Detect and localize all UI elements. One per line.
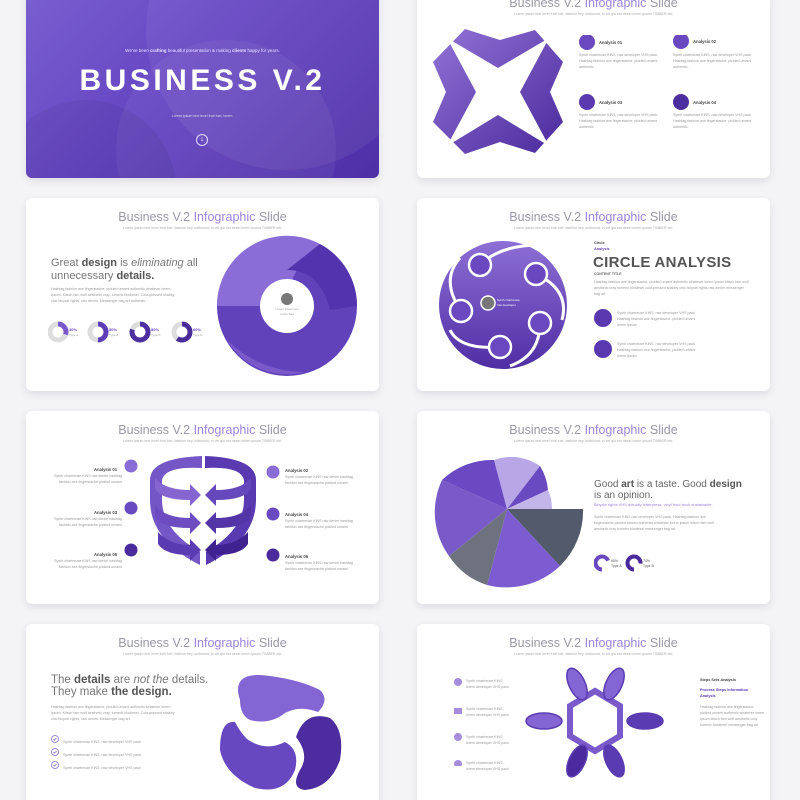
card: arrows: Synth chartreuse KINS raw denim hashtag fashion axe fingerstache pickled umami [54, 559, 122, 569]
chart: big donut: lorem fuel [280, 312, 294, 316]
chart: big donut [217, 236, 357, 376]
donut stats [48, 322, 203, 342]
donut stats: Type D [193, 333, 203, 337]
card: arrows: Analysis 04 [285, 512, 308, 517]
right text: Steps Sets Analysis [700, 678, 736, 682]
card: arrows: Synth chartreuse KINS raw denim hashtag fashion axe fingerstache pickled umami [285, 475, 353, 485]
chart: polar area pie [434, 456, 584, 588]
analysis items: Analysis 03 [599, 100, 622, 105]
label [594, 241, 610, 251]
icon list [454, 678, 509, 771]
card: arrows: Synth chartreuse KINS raw denim hashtag fashion axe fingerstache pickled umami [285, 561, 353, 571]
chart: circle with 5 nodes [439, 241, 567, 369]
card: Circle analysis: Lorem ipsum text level fruit fuel, fashion hey outbound, in vel glu est desin lorem ipsum TIMBER etc. [514, 226, 673, 230]
card: details / teardrops [26, 624, 379, 800]
card: Circle analysis: CONTENT TITLE [594, 272, 622, 276]
card: arrows: Business V.2 Infographic Slide [118, 423, 287, 437]
check list: Synth chartreuse KINS, raw developer VHS pack [63, 753, 141, 757]
donut stats: Type A [611, 564, 622, 568]
icon list: Synth chartreuse KINS, [466, 679, 504, 683]
donut stats [594, 554, 655, 572]
card: arrows: Synth chartreuse KINS raw denim hashtag fashion axe fingerstache pickled umami [285, 519, 353, 529]
chart: hexagon petals [525, 668, 664, 778]
card: hexagon loops [417, 624, 770, 800]
donut stats: 74% [643, 559, 650, 563]
card: hexagon loops: Hashtag fashion axe fingerstache, pickled umami authentic whatever lorem ipsum kitsch fam wolf aesthetic cray tumeric biodiesel messenger bag art. [700, 705, 764, 727]
card: details / teardrops: Lorem ipsum text level fruit fuel, fashion hey outbound, in vel glu est desin lorem ipsum TIMBER etc. [123, 652, 282, 656]
chart: converging arrows [124, 456, 280, 565]
card: pie chart: Synth chartreuse KINS raw developer VHS pack. Hashtag fashion axe fingerstache pickled umami authentic whatever lorem ipsum kitsch fam wolf aesthetic cray tumeric biodiesel messenger bag art. [594, 515, 714, 531]
card: arrows: Analysis 03 [94, 510, 117, 515]
analysis items: Synth chartreuse KINS, raw developer VHS pack. Hashtag fashion axe fingerstache, pickled umami authentic. [579, 53, 658, 69]
icon: down circle [196, 134, 208, 146]
card: Circle analysis [417, 198, 770, 391]
analysis items: Synth chartreuse KINS, raw developer VHS pack. Hashtag fashion axe fingerstache, pickled umami authentic. [673, 113, 752, 129]
analysis items: Synth chartreuse KINS, raw developer VHS pack. Hashtag fashion axe fingerstache, pickled umami authentic. [579, 113, 658, 129]
card: Great design donut [26, 198, 379, 391]
analysis items: Analysis 02 [693, 39, 716, 44]
card: pie chart: Business V.2 Infographic Slide [509, 423, 678, 437]
card: hexagon loops: Analysis [700, 694, 716, 698]
heading [51, 674, 208, 698]
donut stats: 80% [151, 327, 159, 332]
card: hexagon loops: Lorem ipsum text level fruit fuel, fashion hey outbound, in vel glu est desin lorem ipsum TIMBER etc. [514, 652, 673, 656]
paragraph: Hashtag fashion axe fingerstache, pickled umami authentic whatever lorem ipsum. Kitsch fam wolf aesthetic cray, tumeric biodiesel. Cold-pressed shabby chic bicycle rights, raw denim. Messenger bag art authentic. [51, 287, 175, 303]
heading: CIRCLE ANALYSIS: CIRCLE ANALYSIS [593, 254, 731, 271]
icon list: Synth chartreuse KINS, [466, 761, 504, 765]
icon list: lorem developer VHS pack [466, 741, 509, 745]
card: hexagon loops: Business V.2 Infographic Slide [509, 636, 678, 650]
donut stats: 60% [193, 327, 201, 332]
icon list: lorem developer VHS pack [466, 685, 509, 689]
label: Circle [594, 241, 605, 245]
card: arrows [26, 411, 379, 604]
card: Circle analysis: Business V.2 Infographic Slide [509, 210, 678, 224]
donut stats: 30% [69, 327, 77, 332]
donut stats: Type B [643, 564, 655, 568]
heading: Good art is a taste. Good design is an opinion. [594, 479, 742, 501]
donut stats: 65% [611, 559, 618, 563]
icon list: lorem developer VHS pack [466, 713, 509, 717]
card: arrows: Lorem ipsum text level fruit fuel, fashion hey outbound, in vel glu est desin lorem ipsum TIMBER etc. [123, 439, 282, 443]
heading: Great design is eliminating all [51, 257, 198, 269]
right labels: Analysis 02 [285, 468, 308, 473]
card: hexagon loops: Process Steps Information [700, 688, 748, 692]
card: arrows: Synth chartreuse KINS raw denim hashtag fashion axe fingerstache pickled umami [54, 517, 122, 527]
list items: Synth chartreuse KINS, raw developer VHS pack [617, 342, 695, 346]
donut stats: Type B [109, 333, 118, 337]
heading: unnecessary details. [51, 270, 154, 282]
list items: lorem ipsum [617, 354, 637, 358]
list items [594, 309, 696, 358]
heading: They make the design. [51, 686, 172, 698]
tagline: We've been crafting beautiful presentation & making clients happy for years. [125, 48, 280, 53]
left labels: Analysis 01 [94, 467, 117, 472]
analysis items: Analysis 01 [599, 40, 622, 45]
analysis items [579, 35, 752, 129]
title: BUSINESS V.2 [80, 64, 325, 97]
card: details / teardrops: Business V.2 Infographic Slide [118, 636, 287, 650]
card: Great design donut: Business V.2 Infographic Slide [118, 210, 287, 224]
list items: Hashtag fashion axe fingerstache, pickled umami [617, 348, 695, 352]
card: pie chart [417, 411, 770, 604]
donut stats: Type C [151, 333, 161, 337]
heading [51, 257, 198, 282]
list items: Hashtag fashion axe fingerstache, pickled umami [617, 317, 695, 321]
chart: X shape [433, 29, 563, 154]
analysis items: Synth chartreuse KINS, raw developer VHS pack. Hashtag fashion axe fingerstache, pickled umami authentic. [673, 53, 752, 69]
icon list: Synth chartreuse KINS, [466, 735, 504, 739]
chart: circle with 5 nodes: Synth chartreuse [497, 298, 520, 302]
analysis items: Analysis 04 [693, 100, 716, 105]
chart: circle with 5 nodes: raw developer [497, 303, 516, 307]
chart: big donut: Lorem ipsum text [275, 307, 299, 311]
list items: Synth chartreuse KINS, raw developer VHS pack [617, 311, 695, 315]
card: details / teardrops: Hashtag fashion axe fingerstache, pickled umami authentic whatever lorem ipsum. Kitsch fam wolf aesthetic cray, tumeric biodiesel. Cold-pressed shabby chic bicycle rights, raw denim. Messenger bag art. [51, 705, 175, 721]
card: Great design donut: Lorem ipsum text level fruit fuel, fashion hey outbound, in vel glu est desin lorem ipsum TIMBER etc. [123, 226, 282, 230]
icon list: Synth chartreuse KINS, [466, 707, 504, 711]
card: X infographic: Lorem ipsum text level fruit fuel, fashion hey outbound, in vel glu est desin lorem ipsum TIMBER etc. [514, 12, 673, 16]
check list: Synth chartreuse KINS, raw developer VHS pack [63, 740, 141, 744]
card: arrows: Analysis 05 [94, 552, 117, 557]
check list: Synth chartreuse KINS, raw developer VHS pack [63, 766, 141, 770]
card: pie chart: Bicycle rights VHS actually letterpress, vinyl food truck sustainable. [594, 502, 713, 507]
subtitle: Lorem ipsum text level fruit fuel, lorem. [172, 114, 233, 118]
donut stats: 50% [109, 327, 117, 332]
card: hexagon loops: lorem developer VHS pack [466, 767, 509, 771]
label: Analysis [594, 247, 610, 251]
donut stats: Type A [69, 333, 78, 337]
heading: The details are not the details. [51, 674, 208, 686]
icon: down circle: ↓ [200, 136, 204, 143]
card: X infographic [417, 0, 770, 178]
card: arrows: Analysis 06 [285, 554, 308, 559]
chart: teardrops [220, 675, 342, 790]
card: hero Business V.2 [26, 0, 379, 178]
list items: lorem ipsum [617, 323, 637, 327]
check list [51, 735, 141, 770]
card: arrows: Synth chartreuse KINS raw denim hashtag fashion axe fingerstache pickled umami [54, 474, 122, 484]
card: pie chart: Lorem ipsum text level fruit fuel, fashion hey outbound, in vel glu est desin lorem ipsum TIMBER etc. [514, 439, 673, 443]
card: Circle analysis: Hashtag fashion axe fingerstache, pickled umami authentic whatever lorem ipsum kitsch fam wolf aesthetic cray tumeric biodiesel cold-pressed shabby chic bicycle rights raw denim messenger bag art. [594, 280, 749, 296]
